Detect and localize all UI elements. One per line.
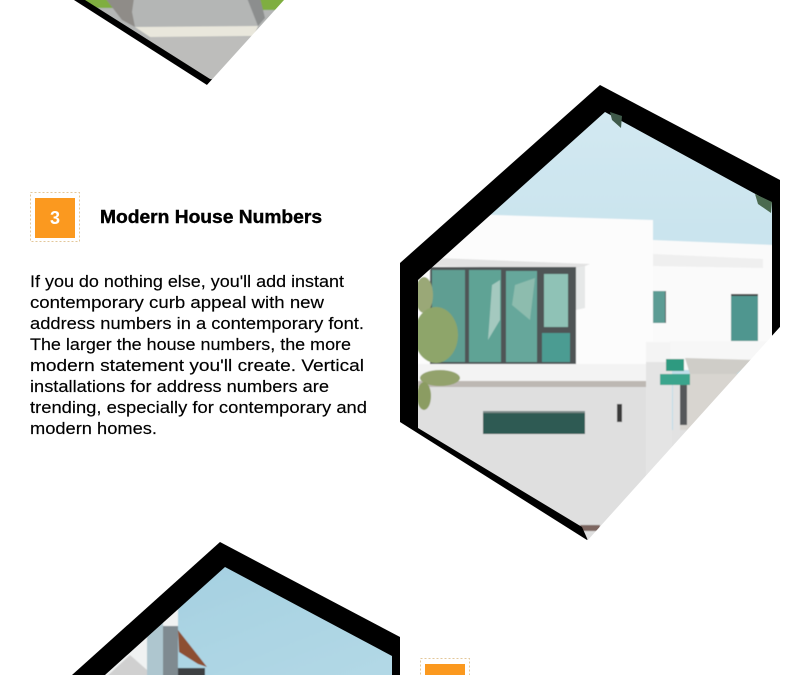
upper white block	[418, 214, 654, 364]
body paragraph: address numbers in a contemporary font.	[30, 315, 364, 333]
step 3 heading	[30, 192, 322, 242]
body paragraph: trending, especially for contemporary and	[30, 399, 367, 417]
grey lower wall	[410, 387, 648, 542]
balcony ledge	[410, 364, 648, 382]
building	[105, 609, 178, 675]
main windows	[430, 267, 576, 364]
body paragraph: If you do nothing else, you'll add instant	[30, 273, 344, 291]
body paragraph: contemporary curb appeal with new	[30, 294, 324, 312]
canopy	[670, 340, 758, 360]
window reflections	[488, 280, 500, 340]
body paragraph	[30, 273, 367, 438]
main hexagon house photo	[400, 85, 800, 560]
hexagon black frame	[400, 85, 780, 540]
top hexagon photo fragment	[74, 0, 284, 85]
heading text: Modern House Numbers	[100, 207, 322, 227]
house photo	[418, 112, 772, 540]
slit window	[483, 411, 585, 434]
brown roof	[178, 630, 207, 667]
body paragraph: installations for address numbers are	[30, 378, 329, 396]
badge 3: 3	[50, 208, 60, 228]
body paragraph: modern homes.	[30, 420, 157, 438]
body paragraph: The larger the house numbers, the more	[30, 336, 351, 354]
bottom hexagon photo	[72, 542, 400, 675]
window overhang	[434, 258, 589, 268]
body paragraph: modern statement you'll create. Vertical	[30, 357, 364, 375]
right wing	[653, 240, 775, 370]
wall light	[617, 404, 622, 422]
badge 3	[30, 192, 80, 242]
base mulch	[580, 525, 600, 531]
tree	[418, 276, 434, 314]
street sign and pole	[680, 385, 687, 425]
badge 4 partial	[420, 658, 470, 675]
small windows	[653, 291, 665, 323]
foliage at frame	[610, 112, 622, 128]
white corner cut	[587, 327, 800, 560]
